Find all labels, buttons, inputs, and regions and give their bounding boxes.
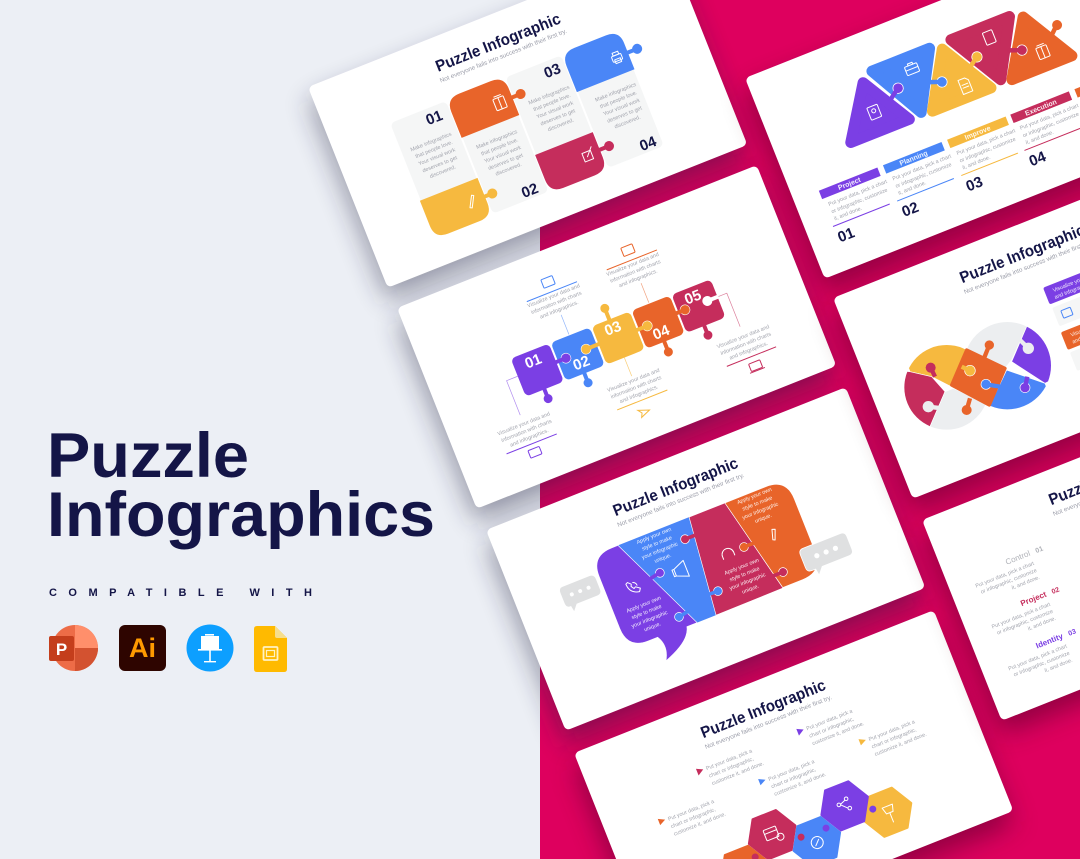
shadow: card 6 <box>833 169 1080 513</box>
card 2 descriptions: it, and done. <box>898 180 927 197</box>
row Identity 03: or infographic, customize <box>1013 651 1071 678</box>
panel: card 5 hexagon puzzle <box>574 610 1013 859</box>
card 3 piece numbers: 05 <box>682 287 704 308</box>
bullet purple: customize it, and done. <box>812 721 865 747</box>
bullet crimson: customize it, and done. <box>711 761 765 787</box>
row Control 01: Put your data, pick a chart <box>975 561 1036 590</box>
bullet crimson <box>697 746 765 790</box>
card 1 body text: deserves to get <box>488 153 524 172</box>
blue triangle <box>872 48 950 124</box>
card 4 subtitle: Not everyone fails into success with their first try. <box>616 472 746 529</box>
card 3 callout crimson: Visualize your data and <box>716 324 770 350</box>
card 2 numbers: 01 <box>835 224 857 246</box>
card 2 descriptions: or infographic, customize <box>831 188 889 215</box>
card 2 descriptions: it, and done. <box>962 155 991 171</box>
card 1 body text: discovered. <box>429 164 457 180</box>
card 2 descriptions: Put your data, pick a chart <box>892 153 953 182</box>
card 1 body text: deserves to get <box>422 155 459 174</box>
card 4 white texts: your infographic <box>641 541 679 561</box>
icon: Illustrator: Ai <box>129 633 156 663</box>
card 6 orange label <box>1061 288 1080 350</box>
left gray chat bubble <box>559 574 604 613</box>
step 3 crimson tab <box>535 127 622 193</box>
card 5 icons <box>763 782 899 859</box>
card 2 descriptions: Put your data, pick a chart <box>828 179 889 208</box>
row Control 01 <box>970 544 1054 604</box>
title: Puzzle Infographics: Puzzle <box>47 421 249 491</box>
card 4 white texts: unique. <box>754 513 773 525</box>
title: Puzzle Infographics: Infographics <box>47 480 435 550</box>
card 4 icons <box>626 525 780 599</box>
panel: card 7 list <box>922 377 1080 721</box>
blue speech segment <box>618 517 726 639</box>
card 2 icons <box>857 13 1052 130</box>
row Identity 03: it, and done. <box>1044 658 1074 674</box>
row Control 01: it, and done. <box>1011 575 1041 591</box>
piece 1 purple <box>511 338 584 410</box>
card 5 knobs <box>750 804 878 859</box>
card 2 descriptions: Put your data, pick a chart <box>1019 103 1080 132</box>
row Control 01: 01 <box>1035 546 1044 555</box>
shadow: card 7 <box>922 391 1080 735</box>
card 2 puzzle knobs <box>885 18 1068 107</box>
card 1 body text: deserves to get <box>606 105 643 125</box>
bullet crimson: Put your data, pick a <box>705 748 753 772</box>
bullet blue <box>759 756 827 801</box>
card 1 body text: Your visual work <box>536 100 575 120</box>
bullet orange: customize it, and done. <box>673 812 727 838</box>
card 3 callout yellow: Visualize your data and <box>606 368 661 394</box>
card 3 piece numbers <box>522 286 712 391</box>
card 3 callout blue: and infographics. <box>539 300 579 321</box>
card 2 numbers: 02 <box>899 199 921 221</box>
purple triangle <box>832 72 909 143</box>
card 3 callout crimson <box>716 324 783 381</box>
right magenta background <box>540 0 1080 859</box>
row Project 02: or infographic, customize <box>996 609 1054 637</box>
card 4 white texts: Apply your own <box>626 595 662 615</box>
card 3 piece numbers: 01 <box>522 350 544 372</box>
card 4 white texts: style to make <box>729 566 761 583</box>
hexagon blue <box>786 812 848 859</box>
card 3 callout blue: information with charts <box>530 290 583 316</box>
piece 3 yellow <box>568 290 660 371</box>
card 2 label bars: Improve <box>964 125 992 142</box>
crimson triangle <box>951 17 1030 91</box>
card 3 piece numbers: 02 <box>571 352 592 374</box>
bullet yellow: chart or infographic, <box>871 727 918 750</box>
yellow triangle <box>913 38 991 111</box>
bullet orange: chart or infographic, <box>670 807 717 830</box>
infinity knobs <box>923 340 1034 415</box>
card 1 body text: that people love. <box>415 140 454 160</box>
step 1 yellow tab <box>420 173 505 239</box>
card 1 body text: that people love. <box>533 93 572 113</box>
card 3 callout yellow: and infographics. <box>619 384 659 405</box>
title: Puzzle Infographics <box>47 421 435 550</box>
card 4 white texts: unique. <box>654 553 672 565</box>
purple speech segment with tail <box>591 529 706 672</box>
card 3 callout yellow <box>606 368 673 426</box>
card 1 body text: Make infographics <box>475 129 519 151</box>
card 3 callout blue <box>520 267 586 323</box>
crimson speech segment <box>679 495 783 615</box>
card 4 white texts: Apply your own <box>724 558 760 577</box>
card 1 numbers: 03 <box>542 60 563 82</box>
card 5 heading: Puzzle Infographic <box>698 677 828 742</box>
bullet orange <box>659 796 727 841</box>
card 1 body text: Make infographics <box>528 85 571 106</box>
card 4 white texts: Apply your own <box>636 527 672 546</box>
card 2 descriptions: or infographic, customize <box>959 137 1017 164</box>
card 4 white texts: your infographic <box>742 501 780 521</box>
shadow: card 5 <box>574 624 1014 859</box>
bullet crimson: chart or infographic, <box>708 756 755 780</box>
card 2 label bars: Project <box>837 177 863 192</box>
card 3 callout orange: information with charts <box>609 259 662 285</box>
card 1 body text: Make infographics <box>594 82 638 104</box>
card 2 descriptions: or infographic, customize <box>895 162 953 190</box>
shadow: card 1 <box>308 0 748 302</box>
card 3 callout purple: and infographics. <box>509 428 550 449</box>
panel: card 3 puzzle row <box>397 165 836 509</box>
card 6 gray row <box>1052 264 1080 326</box>
central orange piece <box>952 350 1005 405</box>
step 2 orange tab <box>446 71 532 138</box>
hexagon orange <box>713 841 776 859</box>
bullet yellow <box>859 716 928 761</box>
card 1 numbers: 02 <box>519 180 541 202</box>
card 3 callout crimson: and infographics. <box>729 341 769 362</box>
card 3 callout purple: information with charts <box>501 418 553 444</box>
hexagon yellow <box>857 783 919 841</box>
card 2 descriptions <box>828 77 1080 222</box>
card 1 body text: Your visual work <box>418 147 457 167</box>
panel: card 4 speech bubble puzzle <box>486 387 925 731</box>
row Identity 03: 03 <box>1067 628 1077 638</box>
card 1 body text: discovered. <box>614 115 642 130</box>
card 4 white texts: style to make <box>742 495 773 513</box>
orange triangle <box>992 6 1072 80</box>
card 1 icons <box>435 48 653 209</box>
left circle pieces <box>904 345 985 430</box>
right gray chat bubble <box>798 532 856 579</box>
card 2 label bars: Execution <box>1024 99 1058 118</box>
card 2 label bars: Planning <box>899 150 929 168</box>
right circle pieces <box>968 322 1051 410</box>
card 3 callout crimson: information with charts <box>720 331 772 357</box>
card 1 body text: Your visual work <box>603 98 641 118</box>
card 2 rules <box>833 128 1080 226</box>
card 3 callout orange: and infographics. <box>618 269 658 289</box>
card 1 numbers <box>423 37 660 225</box>
card 4 white texts: your infographic <box>729 572 767 592</box>
card 3 connectors <box>491 255 742 420</box>
card 3 callout purple <box>497 411 562 466</box>
card 4 white texts: style to make <box>631 604 663 621</box>
left background <box>0 0 540 859</box>
infinity puzzle graphic <box>904 322 1051 430</box>
card 3 callout orange <box>599 236 665 292</box>
icon: Illustrator <box>119 625 166 671</box>
card 2 numbers <box>835 148 1049 246</box>
card 4 white texts: your infographic <box>631 610 669 630</box>
card 1 body text: that people love. <box>599 90 638 110</box>
card 1 body text <box>410 61 649 204</box>
card 2 label bars <box>819 66 1080 199</box>
panel: card 1 numbered tabs <box>308 0 747 288</box>
card 4 white texts: style to make <box>641 535 673 552</box>
card 1 body text: Make infographics <box>410 131 453 153</box>
card 1 numbers: 01 <box>423 107 445 129</box>
row Control 01: Control <box>1004 549 1032 567</box>
row Control 01: or infographic, customize <box>980 568 1038 596</box>
piece 5 crimson <box>671 279 732 346</box>
shadow: card 3 <box>397 179 837 523</box>
row Project 02 <box>986 585 1070 644</box>
card 1 body text: Your visual work <box>484 145 522 165</box>
bullet orange: Put your data, pick a <box>667 799 715 823</box>
orange speech segment <box>725 479 823 596</box>
card 3 piece numbers: 04 <box>650 321 673 344</box>
card 1 heading: Puzzle Infographic <box>433 11 563 76</box>
icon: Keynote <box>186 624 234 672</box>
row Project 02: Project <box>1019 590 1048 608</box>
card 3 callout blue: Visualize your data and <box>527 283 581 309</box>
card 1 subtitle: Not everyone fails into success with their first try. <box>439 28 568 85</box>
card 6 purple label <box>1043 243 1080 304</box>
bullet blue: Put your data, pick a <box>768 759 816 783</box>
row Project 02: 02 <box>1051 586 1061 596</box>
card 2 descriptions: Put your data, pick a chart <box>956 128 1017 157</box>
card 1 body text: deserves to get <box>540 108 577 127</box>
card 2 descriptions: it, and done. <box>833 206 863 222</box>
card 2 descriptions: it, and done. <box>1025 130 1055 146</box>
shadow: card 4 <box>486 401 926 745</box>
card 4 white texts <box>603 487 805 638</box>
card 4 heading: Puzzle Infographic <box>611 455 741 520</box>
card 3 callout purple: Visualize your data and <box>497 411 551 437</box>
piece 2 blue <box>551 327 610 394</box>
panel: card 6 infinity puzzle <box>833 155 1080 499</box>
icon: Google Slides <box>254 626 287 672</box>
row Identity 03: Put your data, pick a chart <box>1008 643 1068 672</box>
icon: PowerPoint: P <box>56 640 67 659</box>
bullet yellow: customize it, and done. <box>874 732 928 758</box>
hexagon purple <box>813 777 876 835</box>
card 5 subtitle: Not everyone fails into success with their first try. <box>704 694 833 751</box>
step 4 blue tab <box>561 25 648 92</box>
card 1 numbers: 04 <box>637 133 660 155</box>
hexagon crimson <box>741 805 803 859</box>
row Project 02: Put your data, pick a chart <box>991 602 1052 631</box>
card 1 body text: that people love. <box>480 137 519 158</box>
row Project 02: it, and done. <box>1027 616 1057 632</box>
bullet purple <box>797 706 865 750</box>
card 4 knobs <box>639 504 790 626</box>
card 4 white texts: unique. <box>741 583 760 596</box>
shadow: card 2 <box>745 0 1080 293</box>
bullet yellow: Put your data, pick a <box>868 719 916 743</box>
card 3 callout yellow: information with charts <box>610 375 663 401</box>
card 6 gray row lower <box>1070 308 1080 371</box>
piece 4 orange <box>632 290 703 363</box>
card 1 body text: discovered. <box>495 162 523 178</box>
card 3 callout orange: Visualize your data and <box>606 252 660 278</box>
card 4 white texts: Apply your own <box>736 487 773 506</box>
card 1 body text: discovered. <box>547 117 575 133</box>
bullet purple: chart or infographic, <box>809 716 856 740</box>
card 1 gray columns <box>390 32 664 237</box>
card 2 numbers: 03 <box>964 173 985 195</box>
bullet blue: customize it, and done. <box>774 772 827 798</box>
panel: card 2 triangle puzzle <box>745 0 1080 279</box>
card 2 numbers: 04 <box>1027 148 1049 170</box>
card 4 white texts: unique. <box>643 621 662 633</box>
subheading: compatible with: COMPATIBLE WITH <box>49 587 312 599</box>
bullet blue: chart or infographic, <box>771 767 818 790</box>
row Identity 03: Identity <box>1035 631 1065 650</box>
icon: PowerPoint <box>49 625 98 671</box>
row Identity 03 <box>1003 626 1080 686</box>
card 2 descriptions: or infographic, customize <box>1022 112 1080 139</box>
bullet purple: Put your data, pick a <box>806 709 854 732</box>
card 3 piece numbers: 03 <box>602 318 624 340</box>
